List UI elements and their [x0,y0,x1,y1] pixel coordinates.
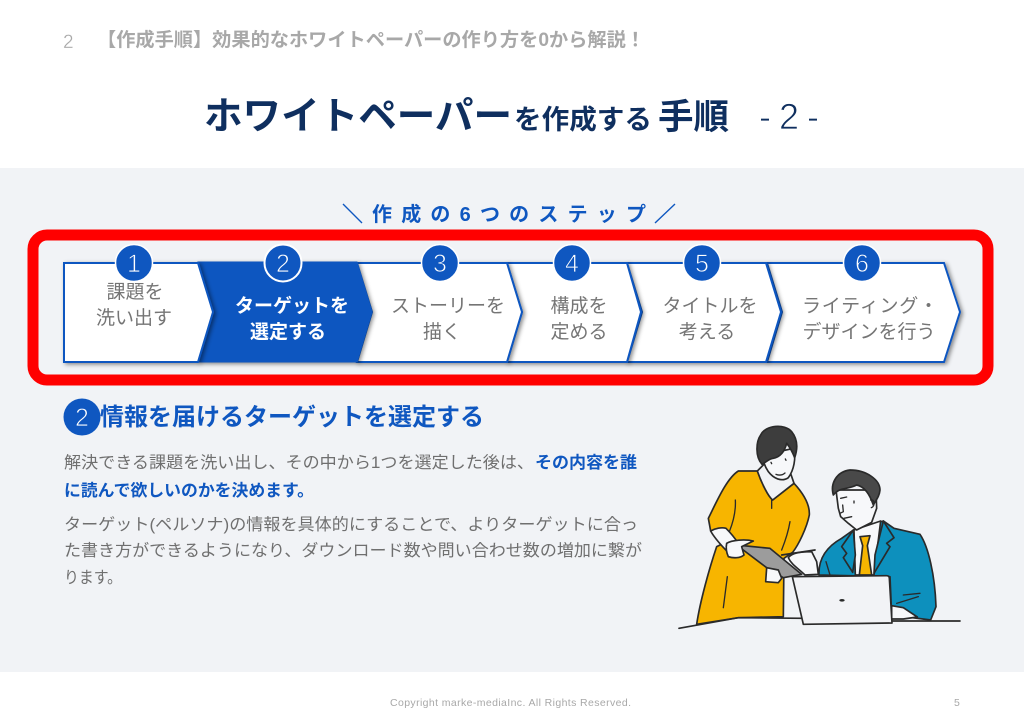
highlight frame: red rounded rectangle [33,235,988,380]
step 5: タイトルを [662,295,758,317]
man: suit [819,521,936,620]
step 2 (active): ターゲットを [235,295,349,317]
body text: paragraph 2: ターゲット(ペルソナ)の情報を具体的にすることで、よりターゲットに合っ [64,515,638,534]
man: tie [859,536,872,575]
man: hand and pen [788,552,818,575]
body text: paragraph 1: その内容を誰 [535,452,638,472]
badge 3 [422,244,458,282]
badge 5 [684,244,720,282]
body text: paragraph 1: に読んで欲しいのかを決めます。 [64,481,314,500]
woman: hair [757,426,797,464]
badge 4: 4 [565,250,579,278]
header: section number and document title: 【作成手順】効果的なホワイトペーパーの作り方を0から解説！ [97,28,645,51]
woman: neck and chest [757,463,794,500]
step 2 (active) [198,262,372,362]
step 3: 描く [423,321,461,343]
badge 2: 2 [276,250,290,278]
body text: paragraph 2: ります。 [64,569,122,587]
badge 4 [554,244,590,282]
body text: paragraph 2 [64,515,643,587]
step 6: デザインを行う [802,321,936,343]
title: ホワイトペーパー [204,96,512,138]
badge 3: 3 [433,250,447,278]
step 5 [627,263,781,362]
man: shirt [854,521,881,575]
step 6: ライティング・ [802,295,938,317]
body text: paragraph 1 [64,452,638,500]
man: face [836,490,877,530]
title [204,96,819,138]
step 6 [767,263,960,362]
clipboard [737,545,802,578]
heading: step 2: 2 [75,404,89,432]
heading: step 2 [64,398,484,436]
step 4: 構成を [550,295,608,317]
woman: face [763,448,795,480]
step 3: ストーリーを [391,296,505,317]
body text: paragraph 1: 解決できる課題を洗い出し、その中から1つを選定した後は、 [64,453,534,472]
woman: hands [726,540,753,558]
header: section number and document title: 2 [63,32,74,53]
body text: paragraph 2: た書き方ができるようになり、ダウンロード数や問い合わせ数の増加に繋が [64,541,643,560]
panel: grey content background [0,168,1024,672]
badge 6 [844,244,880,282]
title: -2- [759,96,819,137]
step number badges [116,244,880,282]
badge 1: 1 [127,250,141,278]
woman: arm [711,528,738,552]
laptop [792,576,892,624]
man: hair [832,470,880,505]
footer: page number: 5 [954,697,960,709]
step 3 [357,263,522,362]
step 4: 定める [550,321,608,343]
badge 6: 6 [855,250,869,278]
step 1: 洗い出す [96,307,172,329]
step 1 [64,263,213,362]
badge 2 [264,244,302,282]
man: lapels [842,521,894,573]
title: を作成する [514,105,652,135]
footer: copyright: Copyright marke-mediaInc. All Rights Reserved. [390,697,631,709]
table line [679,618,960,628]
step chevrons [64,262,960,362]
man: right hand [892,606,917,619]
illustration: two people at a laptop [679,426,960,628]
step 4 [507,263,641,362]
man: facial features [840,497,874,518]
badge 5: 5 [695,250,709,278]
woman: dress [697,471,809,624]
subtitle: six steps: 作成の6つのステップ [372,202,646,226]
heading: step 2: 情報を届けるターゲットを選定する [100,404,484,431]
woman: eyes and mouth [771,459,786,475]
step 1: 課題を [106,282,164,303]
title: 手順 [658,98,729,137]
step 5: 考える [679,321,735,343]
step 2 (active): 選定する [250,321,326,343]
badge 1 [116,244,152,282]
